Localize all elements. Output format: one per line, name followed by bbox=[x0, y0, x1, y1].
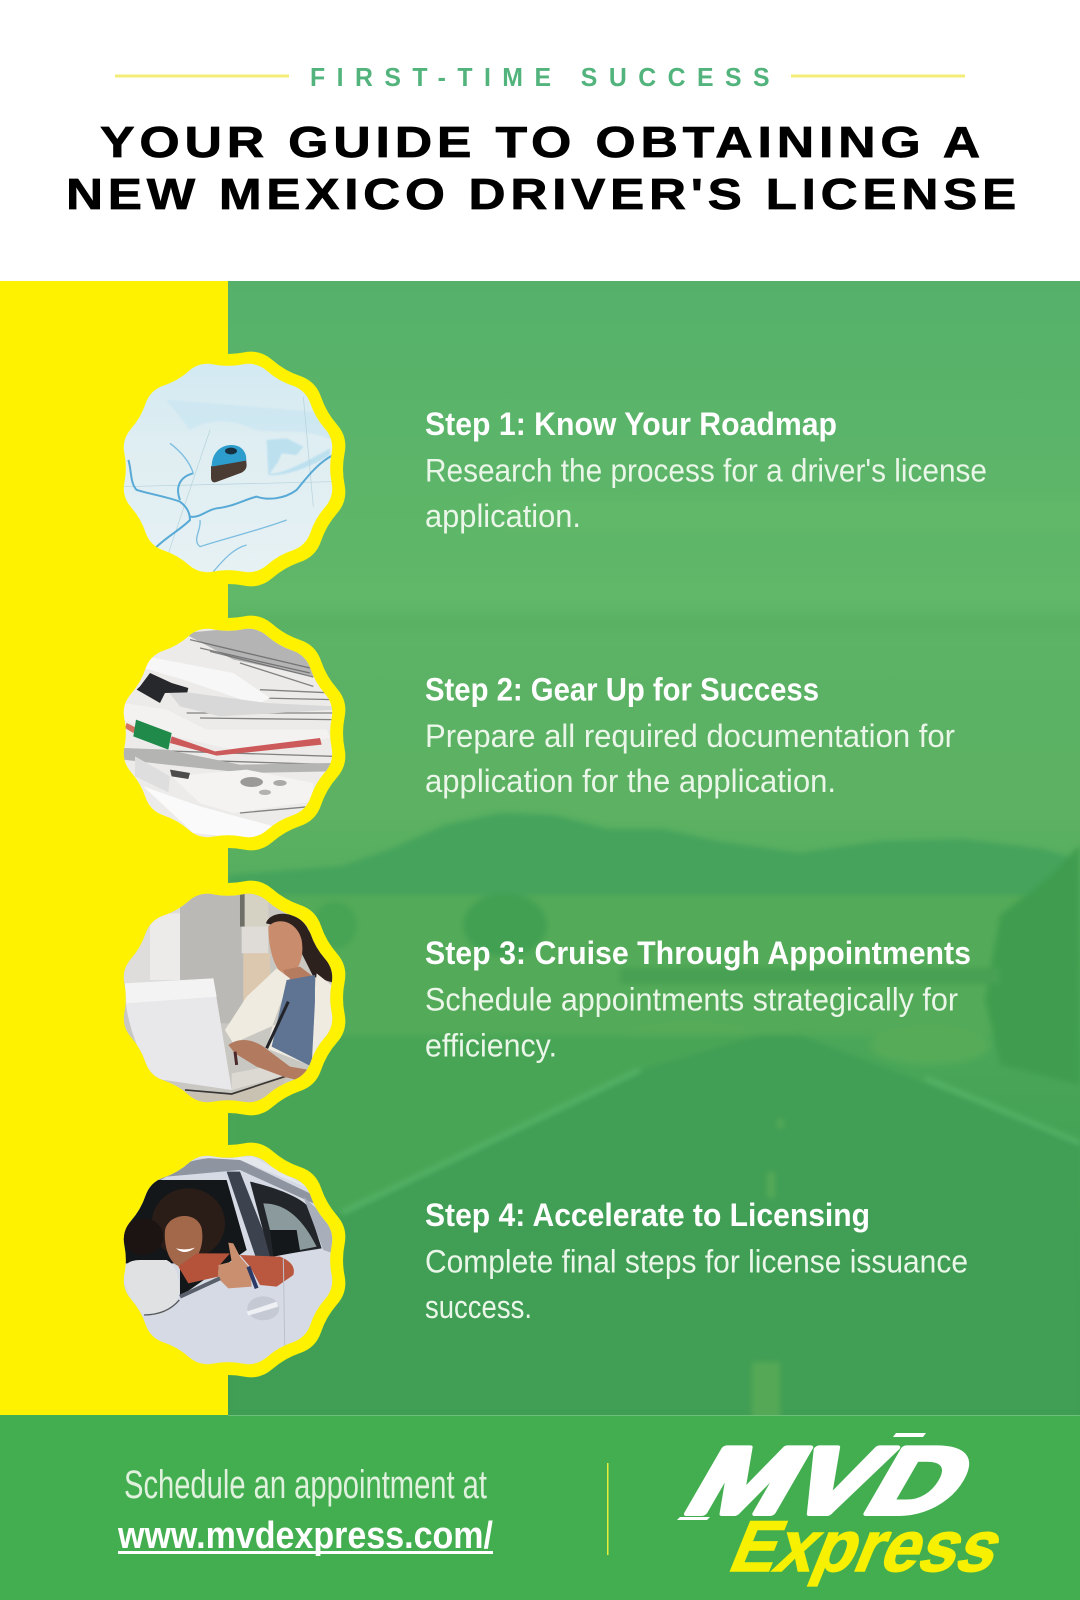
header panel bbox=[0, 0, 1080, 281]
footer panel bbox=[0, 1415, 1080, 1600]
step 1 text bbox=[425, 406, 987, 534]
logo: MVD Express: Express bbox=[720, 1506, 1016, 1586]
footer divider bbox=[607, 1463, 608, 1555]
logo: MVD Express bbox=[668, 1428, 1016, 1586]
step 4 text: Step 4: Accelerate to Licensing bbox=[425, 1197, 870, 1233]
step 3 text: efficiency. bbox=[425, 1028, 557, 1064]
yellow scallop frame: step 3 bbox=[111, 881, 345, 1115]
title bbox=[66, 119, 1021, 219]
step 4 text bbox=[425, 1197, 968, 1325]
image: stack of paperwork bbox=[124, 628, 332, 838]
yellow scallop frame: step 1 bbox=[111, 352, 345, 586]
step 3 text: Schedule appointments strategically for bbox=[425, 982, 958, 1018]
step 4 text: Complete final steps for license issuance bbox=[425, 1244, 968, 1280]
title: NEW MEXICO DRIVER'S LICENSE bbox=[66, 171, 1021, 219]
step 2 text: Step 2: Gear Up for Success bbox=[425, 672, 819, 708]
footer call to action: Schedule an appointment at bbox=[124, 1463, 487, 1507]
step 2 text bbox=[425, 672, 955, 799]
step 1 text: Research the process for a driver's license bbox=[425, 452, 987, 488]
panel: green road landscape background bbox=[200, 281, 1080, 1432]
footer call to action: www.mvdexpress.com/ bbox=[117, 1515, 493, 1557]
image: map with location pin bbox=[124, 364, 332, 572]
yellow scallop frame: step 2 bbox=[111, 616, 345, 850]
footer call to action bbox=[117, 1463, 493, 1557]
image: smiling driver giving a thumbs up from a car window bbox=[124, 1156, 332, 1364]
image: woman working on a laptop bbox=[124, 894, 332, 1102]
logo: MVD Express: MVD bbox=[668, 1428, 995, 1533]
eyebrow: First-Time Success bbox=[115, 62, 965, 92]
step 1 text: application. bbox=[425, 498, 581, 534]
step 4 text: success. bbox=[425, 1289, 532, 1325]
step 1 text: Step 1: Know Your Roadmap bbox=[425, 406, 837, 442]
yellow scallop frame: step 4 bbox=[111, 1143, 345, 1377]
step 3 text: Step 3: Cruise Through Appointments bbox=[425, 935, 971, 971]
eyebrow: First-Time Success: FIRST-TIME SUCCESS bbox=[310, 62, 781, 92]
step 2 text: application for the application. bbox=[425, 763, 836, 799]
step 2 text: Prepare all required documentation for bbox=[425, 718, 955, 754]
title: YOUR GUIDE TO OBTAINING A bbox=[100, 119, 985, 167]
step 3 text bbox=[425, 935, 971, 1064]
yellow side band bbox=[0, 281, 228, 1415]
